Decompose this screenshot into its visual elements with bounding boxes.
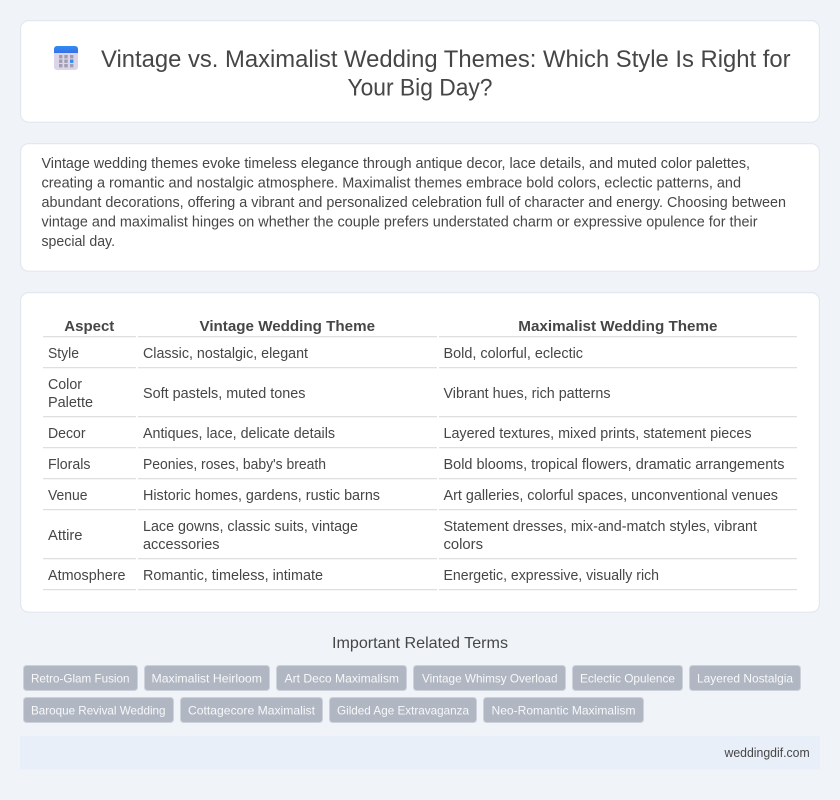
row: atmosphere: Energetic, expressive, visually rich xyxy=(444,568,659,584)
table column headers xyxy=(64,318,718,335)
table column headers: Maximalist Wedding Theme xyxy=(518,318,718,335)
row: atmosphere: Romantic, timeless, intimate xyxy=(143,568,323,584)
related term tags: Neo-Romantic Maximalism xyxy=(492,703,636,717)
footer: weddingdif.com xyxy=(724,745,810,760)
related term tags: Layered Nostalgia xyxy=(697,671,793,685)
row: florals: Peonies, roses, baby's breath xyxy=(143,457,326,473)
title: Your Big Day? xyxy=(348,74,492,102)
related term tags: Art Deco Maximalism xyxy=(284,671,399,685)
row: color palette: Palette xyxy=(48,395,93,411)
related term tags: Gilded Age Extravaganza xyxy=(337,703,469,717)
related term tags: Retro-Glam Fusion xyxy=(31,671,130,685)
panel: header xyxy=(21,21,819,122)
related term tags: Cottagecore Maximalist xyxy=(188,703,316,717)
related term tags xyxy=(24,666,800,722)
row: color palette: Color xyxy=(48,377,82,393)
row: atmosphere: Atmosphere xyxy=(48,568,126,584)
text block: introduction paragraph xyxy=(42,156,786,250)
text block: introduction paragraph: vintage and maximalist hinges on whether the couple prefers understated charm or expressive opulence for their xyxy=(42,214,758,230)
row: florals: Florals xyxy=(48,457,90,473)
row: attire: Lace gowns, classic suits, vintage xyxy=(143,519,358,535)
row: venue xyxy=(48,488,778,504)
text block: introduction paragraph: special day. xyxy=(42,234,115,250)
row: style: Bold, colorful, eclectic xyxy=(444,346,583,362)
row: attire: colors xyxy=(444,537,483,553)
table column headers: Aspect xyxy=(64,318,114,335)
row: style: Classic, nostalgic, elegant xyxy=(143,346,308,362)
panel: introduction xyxy=(21,144,819,271)
row: venue: Art galleries, colorful spaces, unconventional venues xyxy=(444,488,778,504)
title xyxy=(101,46,790,102)
text block: introduction paragraph: abundant decorations, offering a vibrant and personalized celebration full of character and energy. Choosing between xyxy=(42,195,786,211)
text block: introduction paragraph: Vintage wedding themes evoke timeless elegance through antique decor, lace details, and muted color palettes, xyxy=(42,156,750,172)
icon: calendar xyxy=(54,46,78,70)
related term tags: Vintage Whimsy Overload xyxy=(422,671,558,685)
row: decor: Decor xyxy=(48,426,86,442)
row: atmosphere xyxy=(48,568,659,584)
table column headers: Vintage Wedding Theme xyxy=(200,318,375,335)
row: decor: Layered textures, mixed prints, statement pieces xyxy=(444,426,752,442)
footer xyxy=(20,736,820,770)
title: Vintage vs. Maximalist Wedding Themes: Which Style Is Right for xyxy=(101,46,790,73)
row: color palette xyxy=(48,377,610,411)
row: attire: Attire xyxy=(48,528,82,544)
related term tags: Baroque Revival Wedding xyxy=(31,703,166,717)
related term tags: Maximalist Heirloom xyxy=(152,671,262,685)
row: florals xyxy=(48,457,784,473)
row: attire: accessories xyxy=(143,537,220,553)
row: decor: Antiques, lace, delicate details xyxy=(143,426,335,442)
row: attire: Statement dresses, mix-and-match styles, vibrant xyxy=(444,519,757,535)
row: color palette: Soft pastels, muted tones xyxy=(143,386,306,402)
row: decor xyxy=(48,426,752,442)
heading: important related terms: Important Related Terms xyxy=(332,635,508,652)
row: attire xyxy=(48,519,757,553)
row: style: Style xyxy=(48,346,79,362)
row: venue: Historic homes, gardens, rustic barns xyxy=(143,488,380,504)
text block: introduction paragraph: creating a romantic and nostalgic atmosphere. Maximalist themes embrace bold colors, eclectic patterns, and xyxy=(42,176,741,192)
row: florals: Bold blooms, tropical flowers, dramatic arrangements xyxy=(444,457,784,473)
panel: comparison table xyxy=(21,293,819,612)
row: venue: Venue xyxy=(48,488,88,504)
row: style xyxy=(48,346,583,362)
related term tags: Eclectic Opulence xyxy=(580,671,675,685)
row: color palette: Vibrant hues, rich patterns xyxy=(444,386,610,402)
